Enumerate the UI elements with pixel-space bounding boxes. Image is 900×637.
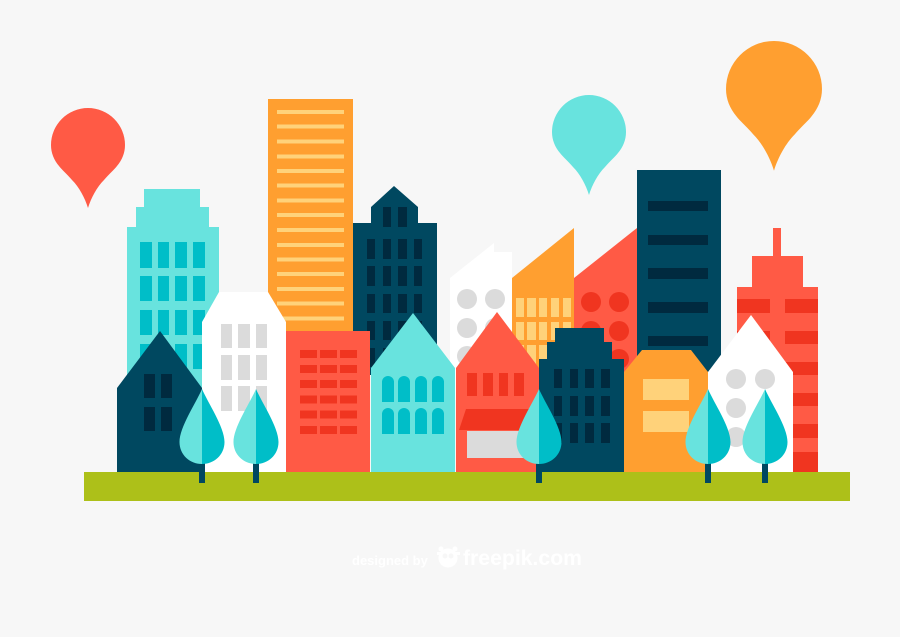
building: teal tower: [127, 189, 219, 400]
watermark: designed by freepik.com: freepik.com: [463, 547, 582, 570]
tree 5: [742, 389, 788, 483]
building: red brick block: [286, 331, 370, 472]
building: navy gabled tower: [353, 186, 437, 375]
building: orange slanted block: [512, 228, 574, 400]
icon: freepik logo: [437, 546, 460, 568]
building: navy tall tower: [637, 170, 721, 390]
tree 2: [234, 389, 278, 483]
house: orange chamfered: [624, 350, 708, 472]
tree 4: [686, 389, 730, 483]
shop window: [467, 431, 527, 458]
house: white gabled with grey dots: [708, 315, 793, 472]
balloon: orange map pin: [726, 41, 822, 171]
building: red slanted block: [574, 228, 637, 400]
house: teal with arched windows: [371, 313, 455, 472]
awning: [459, 409, 530, 430]
building: navy stepped block: [539, 328, 624, 472]
building: white slanted block: [450, 243, 512, 400]
ground: green strip: [84, 472, 850, 501]
building: red skyscraper with antenna: [737, 228, 818, 472]
tree 3: [516, 389, 562, 483]
house: navy gabled: [117, 331, 202, 472]
house: red shop with awning: [456, 312, 539, 472]
house: white with grey windows: [202, 292, 286, 472]
balloon: teal map pin: [552, 95, 626, 195]
watermark: designed by freepik.com: designed by: [352, 553, 429, 568]
balloon: red map pin: [51, 108, 125, 208]
watermark: designed by freepik.com: [352, 546, 582, 570]
building: orange striped tower: [268, 99, 353, 339]
tree 1: [180, 389, 224, 483]
